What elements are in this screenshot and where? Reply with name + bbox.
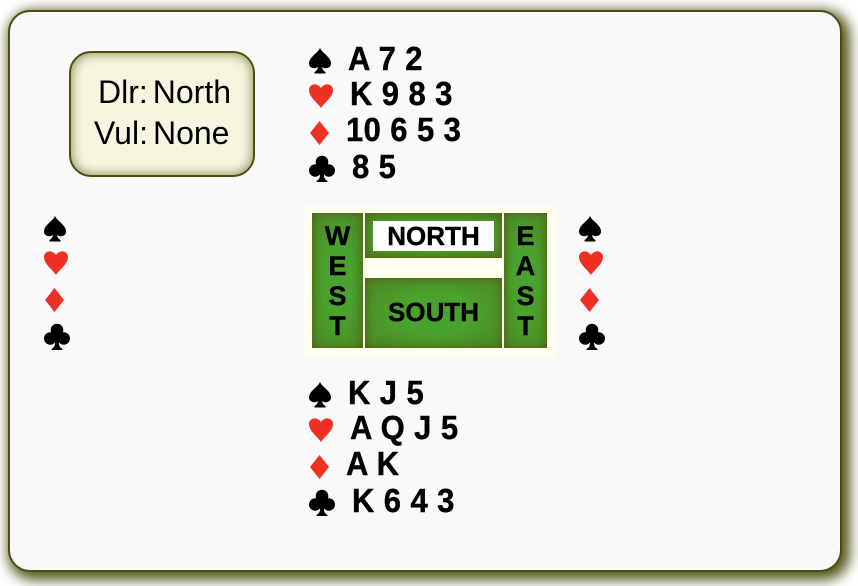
text: hearts: A Q J 5 (350, 409, 458, 447)
label: east: T (517, 311, 534, 341)
label: west: E (328, 251, 346, 281)
icon: spade (579, 216, 601, 242)
label: east: S (516, 281, 534, 311)
icon: diamond (310, 455, 329, 479)
text: dealer: Dlr:North (98, 74, 231, 110)
label: west: W (325, 221, 350, 251)
icon: diamond (310, 121, 329, 145)
text: spades: A 7 2 (348, 40, 423, 78)
south hand (309, 374, 458, 520)
text: vulnerability: Vul:None (94, 115, 229, 151)
text: spades: K J 5 (348, 374, 424, 412)
east hand suit symbols (579, 216, 605, 350)
text: clubs: 8 5 (352, 148, 396, 186)
text: diamonds: 10 6 5 3 (346, 111, 461, 149)
icon: spade (309, 48, 331, 74)
icon: diamond (580, 288, 599, 312)
label: west: T (329, 311, 346, 341)
icon: diamond (45, 288, 64, 312)
label: east (516, 221, 535, 341)
icon: club (579, 324, 605, 350)
north seat (365, 213, 502, 258)
icon: heart (309, 418, 333, 442)
panel: dealer and vulnerability (69, 51, 255, 177)
north hand (309, 40, 461, 186)
label: west (324, 221, 350, 341)
east seat (504, 213, 547, 348)
south seat (365, 278, 502, 348)
label: north: NORTH (387, 221, 480, 251)
icon: spade (44, 216, 66, 242)
icon: club (309, 490, 335, 516)
label: east: E (516, 221, 534, 251)
icon: club (309, 156, 335, 182)
west seat (312, 213, 363, 348)
icon: spade (309, 382, 331, 408)
panel: compass table (305, 206, 555, 356)
icon: heart (309, 84, 333, 108)
icon: club (44, 324, 70, 350)
icon: heart (579, 251, 603, 275)
icon: heart (44, 251, 68, 275)
label: west: S (328, 281, 346, 311)
text: hearts: K 9 8 3 (350, 75, 453, 113)
west hand suit symbols (44, 216, 70, 350)
text: diamonds: A K (346, 445, 399, 483)
text: clubs: K 6 4 3 (352, 482, 455, 520)
label: south: SOUTH (388, 297, 479, 327)
label: east: A (516, 251, 535, 281)
